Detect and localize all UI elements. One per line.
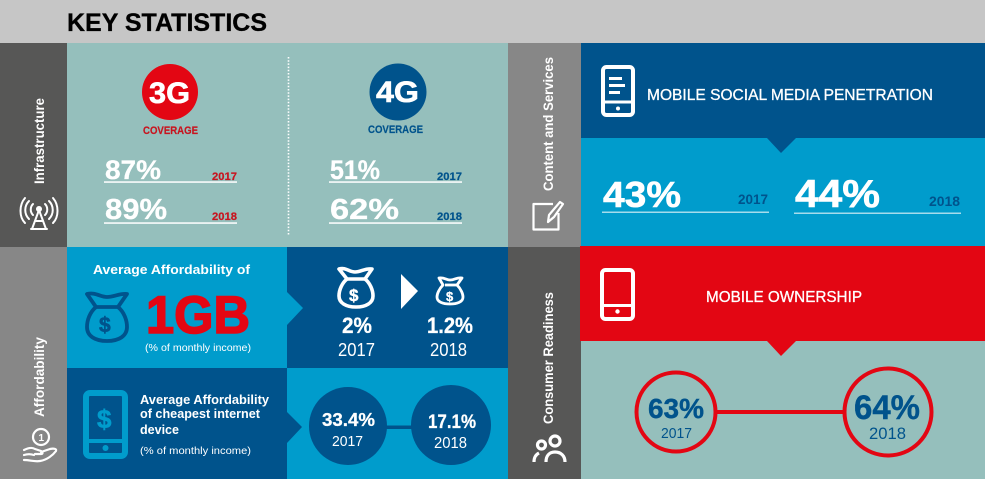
sidebar label: Infrastructure: Infrastructure <box>31 98 47 184</box>
4G 2017 stat: 2017 <box>437 171 462 183</box>
4G 2017 stat: 51% <box>330 155 380 185</box>
title: KEY STATISTICS <box>67 9 267 37</box>
icon: money bag blue <box>87 294 127 341</box>
icon: note and pen <box>534 202 563 230</box>
icon: money bag 2017: $ <box>349 286 359 305</box>
stat: 44% 2018 <box>794 173 961 216</box>
panel: content and services <box>508 43 985 247</box>
sidebar label: Content and Services: Content and Services <box>540 57 556 191</box>
4G 2017 stat <box>329 155 462 185</box>
icon: money bag 2017 <box>339 269 373 307</box>
note: percent of monthly income: (% of monthly income) <box>140 445 251 457</box>
icon: hand holding coin <box>24 429 56 461</box>
heading: mobile social media penetration: MOBILE SOCIAL MEDIA PENETRATION <box>647 87 933 104</box>
stat: 1.2% 2018: 2018 <box>430 339 467 360</box>
4G badge <box>370 64 426 120</box>
circle: 63% 2017 <box>636 372 716 452</box>
3G 2017 stat <box>104 155 237 185</box>
circle: 64% 2018: 64% <box>854 389 920 427</box>
stat: 2% 2017: 2017 <box>338 339 375 360</box>
3G 2017 stat: 2017 <box>212 171 237 183</box>
panel: infrastructure <box>0 43 508 247</box>
panel: affordability <box>0 247 508 479</box>
connector line <box>716 410 844 414</box>
sidebar label: Affordability: Affordability <box>31 337 47 417</box>
circle: 64% 2018: 2018 <box>869 424 906 443</box>
note: percent of monthly income: (% of monthly income) <box>145 342 251 354</box>
panel: consumer readiness <box>508 246 985 479</box>
circle: 33.4% 2017 <box>309 387 387 465</box>
heading: mobile ownership: MOBILE OWNERSHIP <box>706 289 862 306</box>
4G coverage label: COVERAGE <box>368 124 423 136</box>
icon: people <box>534 436 565 462</box>
stat: 44% 2018: 2018 <box>929 193 960 209</box>
heading: cheapest internet device: Average Affordability <box>140 393 269 407</box>
circle: 17.1% 2018: 17.1% <box>428 412 476 433</box>
circle: 64% 2018 <box>844 368 932 456</box>
icon: signal tower <box>20 198 58 229</box>
icon: money bag 2018 <box>437 278 463 304</box>
heading: cheapest internet device: device <box>140 423 179 437</box>
stat: 1.2% 2018: 1.2% <box>427 313 473 338</box>
icon: phone with dollar: $ <box>97 404 112 434</box>
3G 2017 stat: 87% <box>105 155 161 185</box>
sidebar label: Consumer Readiness: Consumer Readiness <box>540 292 556 424</box>
stat: 43% 2017: 43% <box>603 174 681 215</box>
icon: phone outline <box>602 270 633 319</box>
heading: cheapest internet device: of cheapest internet <box>140 407 261 421</box>
4G 2018 stat <box>329 194 462 226</box>
arrow: 2017 to 2018 <box>401 274 418 309</box>
circle: 33.4% 2017: 33.4% <box>322 410 375 430</box>
icon: money bag 2018: $ <box>446 289 454 304</box>
heading: cheapest internet device <box>140 393 269 437</box>
3G badge: 3G <box>149 77 190 110</box>
connector and circles <box>309 385 491 465</box>
circle: 17.1% 2018: 2018 <box>434 435 467 452</box>
big figure: 1GB: 1GB <box>146 286 250 345</box>
stat: 1.2% 2018 <box>427 313 473 360</box>
icon: phone with dollar <box>85 393 126 456</box>
circle: 17.1% 2018 <box>411 385 491 465</box>
stat: 2% 2017: 2% <box>342 313 372 338</box>
stat: 43% 2017 <box>602 174 769 215</box>
4G 2018 stat: 62% <box>330 194 399 226</box>
icon: phone with text lines <box>603 67 633 115</box>
4G 2018 stat: 2018 <box>437 211 462 223</box>
3G 2018 stat: 2018 <box>212 211 237 223</box>
stat: 43% 2017: 2017 <box>738 191 768 207</box>
stat: 44% 2018: 44% <box>795 173 880 216</box>
3G coverage label: COVERAGE <box>143 125 198 137</box>
3G badge <box>142 64 198 120</box>
3G 2018 stat <box>104 194 237 226</box>
circle: 33.4% 2017: 2017 <box>332 434 363 450</box>
3G 2018 stat: 89% <box>105 194 167 226</box>
heading: average affordability of 1GB: Average Affordability of <box>93 262 251 277</box>
icon: money bag blue: $ <box>99 314 111 337</box>
stat: 2% 2017 <box>338 313 375 360</box>
circle: 63% 2017: 63% <box>648 393 704 424</box>
icon: hand holding coin: 1 <box>38 433 44 444</box>
circle: 63% 2017: 2017 <box>661 425 692 442</box>
4G badge: 4G <box>376 76 419 109</box>
